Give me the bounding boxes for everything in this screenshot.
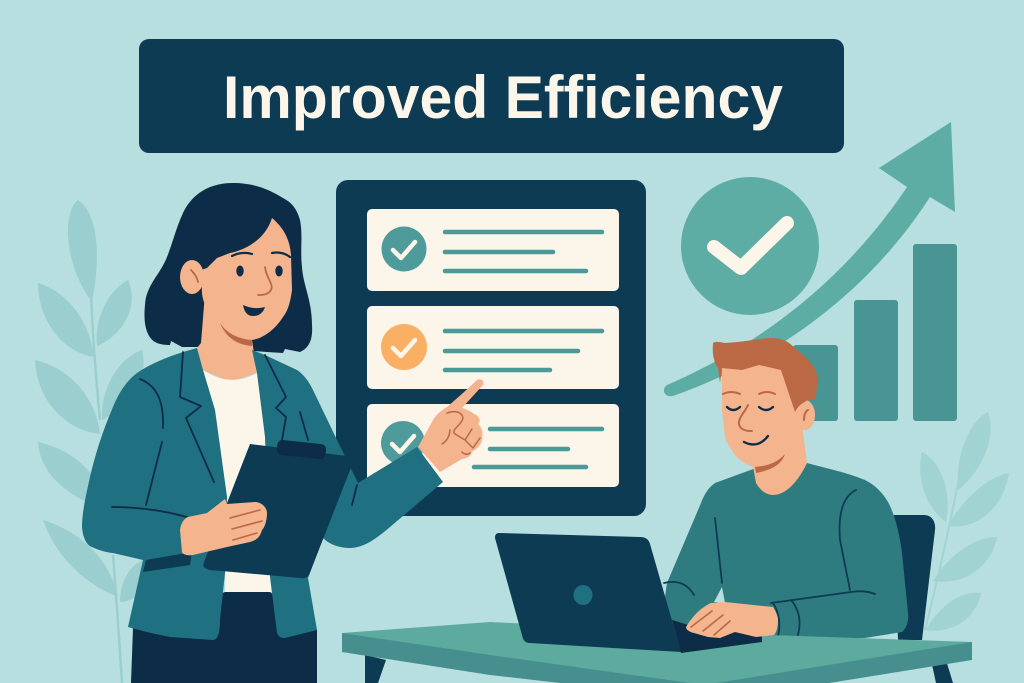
sweater detail lines <box>664 490 875 636</box>
head <box>722 362 802 467</box>
panel: checklist <box>336 180 646 516</box>
jacket detail lines <box>112 352 357 517</box>
holding hand <box>180 499 267 555</box>
sweater <box>660 463 908 640</box>
desk side edges <box>342 633 972 683</box>
laptop lid <box>495 533 681 652</box>
title text: Improved Efficiency <box>223 64 784 131</box>
title banner <box>139 39 844 153</box>
chin shadow <box>755 454 785 473</box>
checklist row 1 <box>367 209 619 291</box>
bar chart <box>793 244 957 421</box>
jacket left panel <box>82 348 227 640</box>
checklist row 3 <box>367 404 619 487</box>
right decorative plant <box>920 412 1009 631</box>
keyboard base <box>672 620 762 653</box>
laptop logo <box>574 585 592 605</box>
sleeve shadow <box>143 552 192 572</box>
face <box>201 218 292 340</box>
icon: check badge <box>681 177 819 315</box>
checklist row 2 <box>367 306 619 389</box>
facial features <box>723 392 808 444</box>
gap between arm and torso <box>714 587 725 603</box>
shirt <box>203 370 272 592</box>
woman presenting <box>82 183 484 683</box>
desk legs <box>365 655 953 683</box>
desk <box>342 622 972 683</box>
growth arrow <box>664 122 955 396</box>
trousers <box>131 592 317 683</box>
neck <box>197 268 257 382</box>
facial features <box>191 252 290 346</box>
left decorative plant <box>35 200 150 683</box>
jacket right panel and pointing arm <box>252 350 443 638</box>
neck <box>750 425 807 495</box>
hair <box>144 183 312 353</box>
pointing hand <box>418 379 484 472</box>
ear <box>795 400 815 430</box>
man at laptop <box>660 338 908 640</box>
laptop <box>495 533 762 653</box>
chair <box>894 515 935 640</box>
clipboard <box>203 440 352 578</box>
man's hand <box>686 602 778 638</box>
desk top <box>342 622 972 683</box>
hair <box>713 338 817 412</box>
ear <box>180 260 204 294</box>
